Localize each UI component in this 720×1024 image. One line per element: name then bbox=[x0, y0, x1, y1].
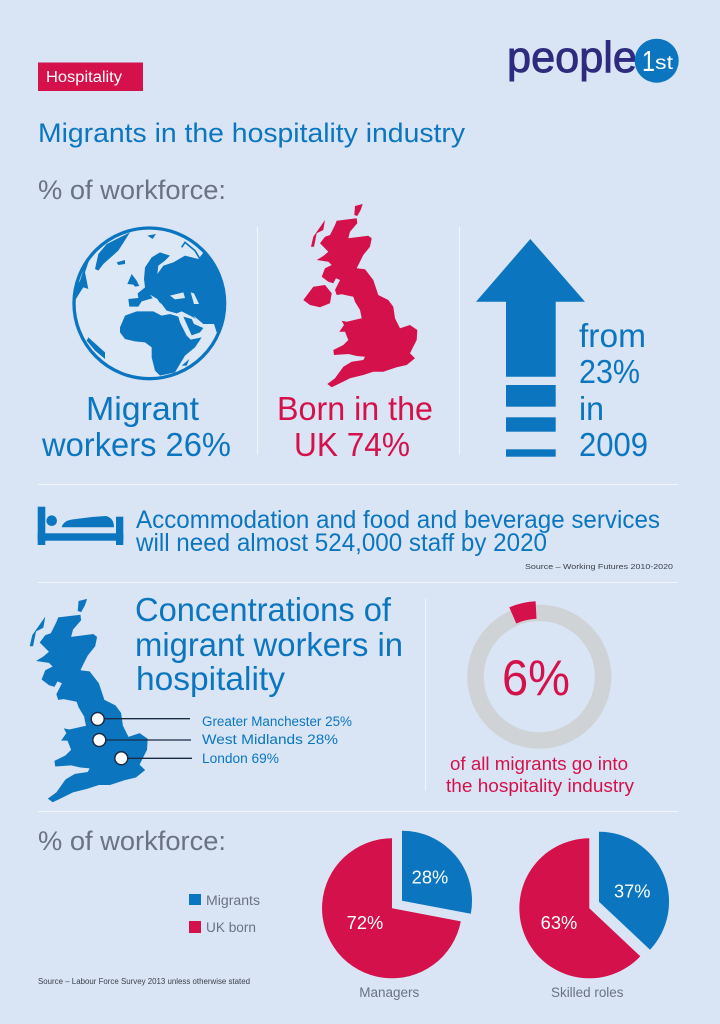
title: Migrants in the hospitality industry bbox=[38, 118, 466, 148]
chart: donut 6%: 6% bbox=[502, 650, 570, 706]
source: Working Futures: Source – Working Futures 2010-2020 bbox=[525, 562, 673, 571]
icon: bed bbox=[38, 507, 123, 545]
tag: Hospitality bbox=[38, 62, 143, 91]
legend bbox=[189, 893, 260, 935]
heading: concentrations bbox=[135, 591, 403, 697]
tag: Hospitality: Hospitality bbox=[46, 69, 122, 86]
pie chart: skilled roles: 37% bbox=[614, 882, 650, 902]
heading: concentrations: migrant workers in bbox=[135, 626, 403, 663]
pie chart: managers: 72% bbox=[347, 913, 383, 933]
map labels bbox=[202, 714, 352, 766]
pie chart: skilled roles bbox=[519, 832, 669, 1000]
legend: Migrants bbox=[206, 893, 260, 908]
text: migrant workers bbox=[41, 390, 231, 463]
heading: % of workforce second: % of workforce: bbox=[38, 826, 226, 856]
text: donut caption bbox=[446, 754, 634, 796]
map labels: London 69% bbox=[202, 751, 279, 766]
pie chart: managers bbox=[322, 831, 472, 1000]
text: from 23% in 2009: 2009 bbox=[579, 426, 648, 463]
logo: people 1st: st bbox=[655, 53, 674, 74]
icon: UK map red bbox=[303, 204, 417, 387]
text: born in the UK bbox=[277, 390, 433, 463]
text: donut caption: the hospitality industry bbox=[446, 776, 634, 796]
text: born in the UK: Born in the bbox=[277, 390, 433, 427]
text: from 23% in 2009: from bbox=[579, 317, 646, 354]
text: migrant workers: workers 26% bbox=[41, 426, 231, 463]
logo: people 1st: 1 bbox=[642, 46, 655, 78]
text: donut caption: of all migrants go into bbox=[450, 754, 628, 774]
text: migrant workers: Migrant bbox=[86, 390, 199, 427]
pie chart: managers: Managers bbox=[359, 985, 420, 1000]
pie chart: skilled roles: 63% bbox=[541, 913, 577, 933]
text: staff needed bbox=[135, 506, 660, 557]
text: from 23% in 2009 bbox=[579, 317, 648, 463]
icon: up arrow bbox=[476, 239, 585, 457]
text: born in the UK: UK 74% bbox=[294, 426, 410, 463]
heading: % of workforce: % of workforce: bbox=[38, 175, 226, 205]
pie chart: skilled roles: Skilled roles bbox=[551, 985, 624, 1000]
text: staff needed: Accommodation and food and beverage services bbox=[136, 506, 660, 534]
map labels: West Midlands 28% bbox=[202, 732, 338, 747]
text: from 23% in 2009: 23% bbox=[579, 353, 640, 390]
legend: UK born bbox=[206, 920, 256, 935]
heading: concentrations: Concentrations of bbox=[135, 591, 392, 628]
map labels: Greater Manchester 25% bbox=[202, 714, 352, 729]
map: UK blue with markers bbox=[30, 599, 192, 802]
chart: donut 6% bbox=[476, 601, 603, 740]
heading: concentrations: hospitality bbox=[136, 660, 286, 697]
text: from 23% in 2009: in bbox=[579, 390, 604, 427]
source: Labour Force Survey: Source – Labour Force Survey 2013 unless otherwise stated bbox=[38, 977, 250, 986]
text: staff needed: will need almost 524,000 staff by 2020 bbox=[135, 529, 547, 557]
pie chart: managers: 28% bbox=[412, 868, 448, 888]
icon: globe bbox=[70, 228, 233, 379]
logo: people 1st: people bbox=[507, 33, 637, 82]
